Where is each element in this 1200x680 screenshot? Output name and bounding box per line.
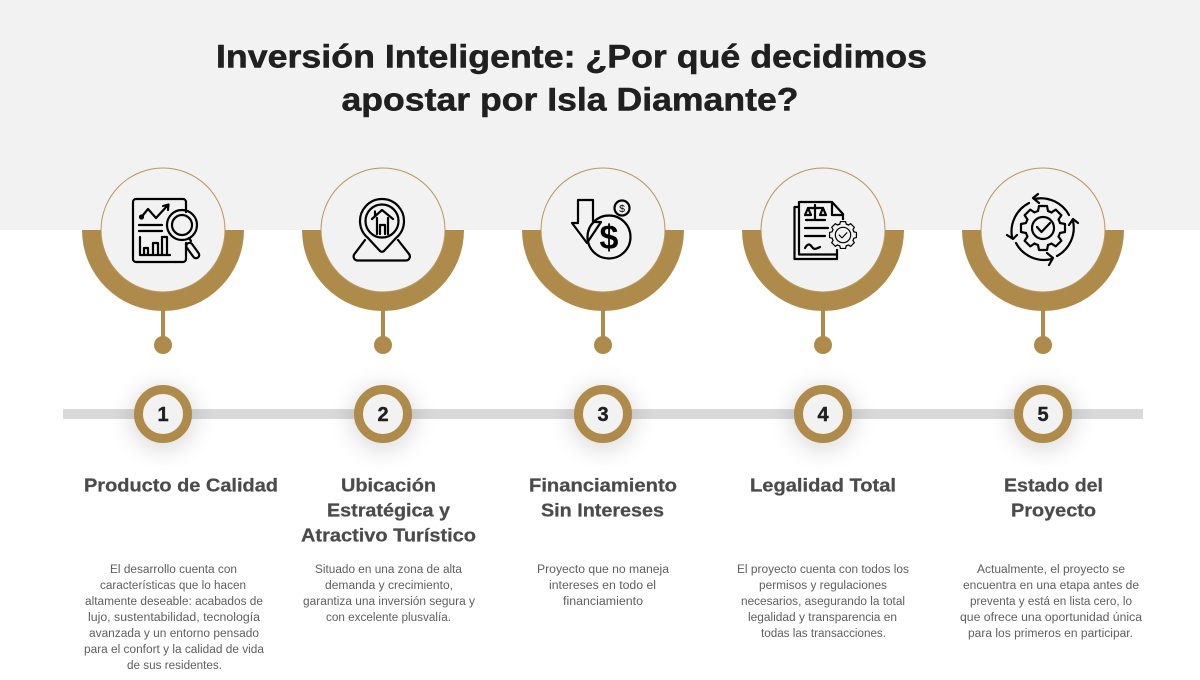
panel: step 2 ubicacion <box>301 168 476 624</box>
number badge 3: 3 <box>597 404 609 426</box>
heading 2: Atractivo Turístico <box>301 526 476 546</box>
connector 2 <box>374 310 392 354</box>
heading 2 <box>301 476 476 546</box>
heading 3: Sin Intereses <box>541 500 664 520</box>
gold semicircle 1 <box>82 230 244 311</box>
title: apostar por Isla Diamante? <box>342 82 798 118</box>
heading 1: Producto de Calidad <box>84 476 278 496</box>
gold semicircle 4 <box>742 230 904 311</box>
description 2: con excelente plusvalía. <box>326 612 451 624</box>
description 1: características que lo hacen <box>100 580 246 592</box>
icon: report with magnifier <box>133 199 199 262</box>
panel: step 3 financiamiento <box>522 168 684 608</box>
description 1: avanzada y un entorno pensado <box>89 628 259 640</box>
description 3 <box>537 564 670 608</box>
number badge 5 <box>1011 386 1075 450</box>
title <box>216 38 927 118</box>
connector 1 <box>154 310 172 354</box>
description 1: para el confort y la calidad de vida <box>84 644 265 656</box>
description 4: El proyecto cuenta con todos los <box>737 564 909 576</box>
number badge 2 <box>351 386 415 450</box>
heading 5: Estado del <box>1004 476 1103 496</box>
icon: legal document with gear <box>794 202 856 259</box>
description 5 <box>960 564 1143 640</box>
description 5: Actualmente, el proyecto se <box>977 564 1125 576</box>
number badge 2: 2 <box>377 404 389 426</box>
gold semicircle 3 <box>522 230 684 311</box>
icon: down arrow and dollar coins: $ <box>619 203 625 215</box>
gold semicircle 2 <box>302 230 464 311</box>
panel: step 1 producto de calidad <box>82 168 278 672</box>
description 5: que ofrece una oportunidad única <box>960 612 1143 624</box>
heading 4: Legalidad Total <box>750 476 896 496</box>
description 1: lujo, sustentabilidad, tecnología <box>88 612 261 624</box>
number badge 1 <box>131 386 195 450</box>
icon circle 2 <box>321 168 445 292</box>
description 1 <box>84 564 265 672</box>
description 4: todas las transacciones. <box>761 628 886 640</box>
gold semicircle 5 <box>962 230 1124 311</box>
heading 2: Estratégica y <box>327 500 450 520</box>
number badge 1: 1 <box>157 404 169 426</box>
description 3: Proyecto que no maneja <box>537 564 670 576</box>
connector 3 <box>594 310 612 354</box>
connector 4 <box>814 310 832 354</box>
description 3: intereses en todo el <box>549 580 656 592</box>
description 3: financiamiento <box>563 596 643 608</box>
icon circle 4 <box>761 168 885 292</box>
description 2 <box>303 564 475 624</box>
icon: down arrow and dollar coins <box>572 200 630 258</box>
number badge 4: 4 <box>817 404 829 426</box>
connector 5 <box>1034 310 1052 354</box>
number badge 4 <box>791 386 855 450</box>
description 2: demanda y crecimiento, <box>325 580 453 592</box>
title: Inversión Inteligente: ¿Por qué decidimos <box>216 38 927 74</box>
description 4 <box>737 564 909 640</box>
description 5: encuentra en una etapa antes de <box>963 580 1139 592</box>
description 1: de sus residentes. <box>127 660 222 672</box>
header band <box>0 0 1200 230</box>
description 1: altamente deseable: acabados de <box>85 596 263 608</box>
description 2: garantiza una inversión segura y <box>303 596 475 608</box>
icon: down arrow and dollar coins: $ <box>600 219 619 257</box>
description 5: preventa y está en lista cero, lo <box>970 596 1132 608</box>
description 5: para los primeros en participar. <box>968 628 1133 640</box>
description 2: Situado en una zona de alta <box>315 564 463 576</box>
timeline track <box>63 409 1143 419</box>
number badge 5: 5 <box>1037 404 1049 426</box>
icon circle 1 <box>101 168 225 292</box>
description 4: necesarios, asegurando la total <box>741 596 905 608</box>
icon circle 3 <box>541 168 665 292</box>
panel: step 5 estado del proyecto <box>960 168 1143 640</box>
heading 3 <box>529 476 677 520</box>
heading 5 <box>1004 476 1103 520</box>
icon: location pin with house <box>354 199 410 260</box>
description 1: El desarrollo cuenta con <box>110 564 237 576</box>
heading 2: Ubicación <box>341 476 436 496</box>
icon: gear with check and cycle arrows <box>1007 194 1078 265</box>
heading 5: Proyecto <box>1011 500 1096 520</box>
description 4: legalidad y transparencia en <box>748 612 897 624</box>
description 4: permisos y regulaciones <box>759 580 887 592</box>
icon circle 5 <box>981 168 1105 292</box>
panel: step 4 legalidad <box>737 168 909 640</box>
number badge 3 <box>571 386 635 450</box>
heading 3: Financiamiento <box>529 476 677 496</box>
